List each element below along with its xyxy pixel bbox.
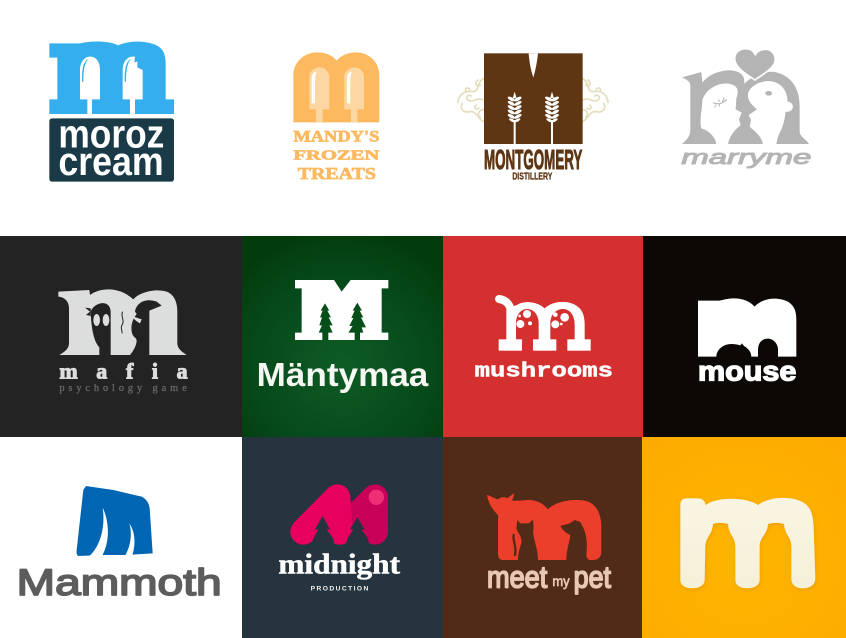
panel background	[242, 236, 443, 437]
icon: left wheat	[507, 92, 522, 144]
text block: mandy's frozen treats	[293, 129, 380, 183]
icon: cream m	[680, 498, 815, 588]
text: midnight: midnight	[278, 550, 401, 581]
logo: montgomery distillery: MONTGOMERY	[484, 144, 582, 175]
text: mammoth: Mammoth	[17, 561, 222, 603]
panel background	[642, 437, 846, 638]
icon: orange m with popsicles	[293, 52, 379, 122]
panel background	[643, 236, 846, 437]
icon: mafia m with faces	[58, 289, 187, 355]
icon: right wheat	[544, 92, 560, 144]
icon: left ornament	[458, 78, 484, 122]
text: mushrooms: mushrooms	[475, 361, 613, 384]
panel background	[443, 437, 642, 638]
text: mafia: mafia	[59, 359, 188, 384]
text: production: PRODUCTION	[311, 585, 369, 592]
text block: moroz cream	[49, 113, 174, 184]
text block: montgomery distillery	[484, 144, 582, 182]
text block: montgomery distillery: DISTILLERY	[512, 171, 552, 182]
icon: mushroom m	[499, 299, 591, 351]
text block: mandy's frozen treats: TREATS	[298, 164, 376, 183]
text block: meet my pet: meet	[487, 561, 548, 595]
logo: mandy's frozen treats	[293, 52, 380, 183]
text block: moroz cream: cream	[58, 140, 164, 184]
icon: midnight m	[303, 490, 384, 547]
text block: mandy's frozen treats: MANDY'S	[293, 129, 379, 146]
text block: mandy's frozen treats: FROZEN	[293, 147, 380, 162]
text: marryme: marryme	[681, 146, 811, 169]
panel: cream m	[642, 437, 846, 638]
logo: marryme	[681, 49, 811, 169]
icon: cream m shadow	[681, 500, 816, 590]
panel: mäntymaa	[242, 236, 443, 437]
text block: meet my pet: pet	[574, 561, 611, 595]
panel background	[242, 437, 443, 638]
logo: montgomery distillery	[458, 53, 608, 182]
panel: mouse	[643, 236, 846, 437]
panel: mushrooms	[443, 236, 643, 437]
icon: m with trees	[295, 280, 388, 340]
icon: blue mammoth	[77, 486, 153, 556]
icon: right ornament	[582, 78, 608, 122]
logo: moroz cream	[49, 42, 174, 184]
panel: mafia	[0, 236, 242, 437]
icon: blue m with popsicles	[49, 42, 174, 114]
icon: m with pets	[487, 493, 601, 560]
panel background	[0, 236, 242, 437]
text block: meet my pet: my	[552, 573, 570, 589]
panel: meet my pet	[443, 437, 642, 638]
panel: mammoth	[17, 486, 222, 603]
text: mouse: mouse	[698, 356, 796, 387]
icon: brown m block	[484, 53, 583, 144]
icon: heart	[735, 49, 775, 80]
text block: meet my pet	[487, 561, 611, 595]
icon: kissing faces m	[682, 70, 809, 144]
text: psychology game: psychology game	[59, 383, 187, 394]
panel background	[443, 236, 643, 437]
text block: moroz cream: moroz	[58, 113, 164, 157]
text: mäntymaa: Mäntymaa	[257, 357, 429, 394]
panel: midnight	[242, 437, 443, 638]
icon: mouse m	[698, 298, 796, 357]
